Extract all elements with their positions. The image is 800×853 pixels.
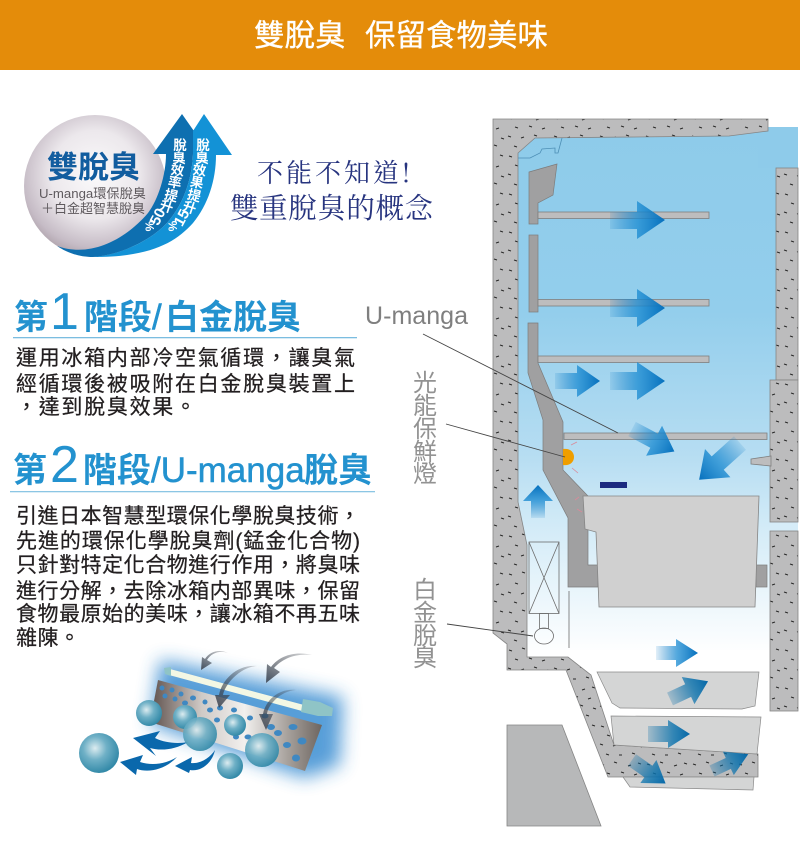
heading: stage 1: / <box>152 298 162 337</box>
duct detail <box>518 138 562 158</box>
text: stage 2 description: 食物最原始的美味，讓冰箱不再五味 <box>16 603 360 626</box>
right door walls <box>770 168 798 711</box>
illustration: deodorising filter <box>79 651 343 779</box>
heading: stage 1: 階段 <box>84 299 152 337</box>
text: stage 2 description: 進行分解，去除冰箱内部異味，保留 <box>16 580 360 603</box>
chiller box <box>583 496 759 607</box>
shelves <box>538 212 771 466</box>
insulated outer wall <box>493 119 768 777</box>
text: stage 2 description: 引進日本智慧型環保化學脫臭技術， <box>16 505 360 528</box>
heading: stage 2: 階段 <box>83 452 151 490</box>
heading: stage 1: 白金脫臭 <box>165 299 301 337</box>
label: light preservation lamp: 鮮 <box>413 439 437 466</box>
label: light preservation lamp: 能 <box>413 393 437 420</box>
back panels <box>528 164 767 587</box>
heading: stage 2: 脫臭 <box>304 452 372 490</box>
title banner: 保留食物美味 <box>365 19 548 53</box>
text: stage 2 description <box>16 505 360 650</box>
label: platinum deodoriser: 臭 <box>413 645 437 672</box>
handwritten concept text <box>230 153 434 227</box>
label: light preservation lamp: 燈 <box>413 461 437 488</box>
label: platinum deodoriser: 白 <box>413 577 437 604</box>
indicator bar <box>600 482 627 488</box>
light arrow text <box>166 138 210 231</box>
heading: stage 2: /U-manga <box>151 451 305 490</box>
text: stage 1 description: 運用冰箱内部冷空氣循環，讓臭氣 <box>16 347 355 370</box>
metal perforated panel <box>150 680 322 771</box>
diagram: refrigerator cross-section <box>493 119 798 826</box>
heading: stage 2 <box>10 436 375 494</box>
dark arrow text: 效 <box>170 161 186 179</box>
dark arrow text <box>143 138 187 231</box>
label: U-manga: U-manga <box>365 302 468 330</box>
title banner <box>0 0 800 70</box>
heading: stage 2: 第 <box>13 452 47 490</box>
badge subtext: U-manga環保脫臭 <box>39 186 146 201</box>
heading: stage 1: 1 <box>50 283 79 341</box>
leader line: platinum deodoriser <box>447 624 533 636</box>
light arrow text: % <box>166 220 180 231</box>
cold air interior <box>518 127 798 650</box>
drawers <box>597 672 761 790</box>
badge subtext <box>39 186 146 216</box>
dark arrow text: 臭 <box>172 150 186 166</box>
leader line: U-manga <box>423 334 618 433</box>
light arrow text: 脫 <box>196 138 210 153</box>
dark arrow text: 率 <box>167 173 183 191</box>
sphere <box>24 115 166 257</box>
text: stage 2 description: 雜陳。 <box>16 627 80 650</box>
handwritten concept text: 雙重脫臭的概念 <box>230 186 434 227</box>
lamp tube <box>164 667 333 716</box>
text: stage 1 description: 經循環後被吸附在白金脫臭裝置上 <box>16 373 355 396</box>
dark arrow text: 提 <box>163 187 180 205</box>
lamp <box>563 442 582 512</box>
blue outgoing arrows <box>120 731 215 775</box>
title banner: 雙脫臭 <box>254 19 346 53</box>
handwritten concept text: 不能不知道! <box>257 153 413 190</box>
compressor block <box>507 725 601 826</box>
heading: stage 2: 2 <box>50 436 79 494</box>
text: stage 1 description: ，達到脫臭效果。 <box>16 396 196 419</box>
light arrow text: 提 <box>186 187 203 205</box>
label: platinum deodoriser: 脫 <box>413 623 437 650</box>
heading: stage 1 <box>13 283 357 341</box>
label: platinum deodoriser: 金 <box>413 600 437 627</box>
light arrow text: 15 <box>171 207 193 229</box>
label: light preservation lamp: 保 <box>413 416 437 443</box>
dark arrow text: % <box>143 220 157 231</box>
blue glow <box>150 660 343 778</box>
badge: double deodorising sphere with arrows <box>24 114 232 257</box>
light arrow text: 升 <box>181 199 198 217</box>
text: stage 1 description <box>16 347 355 419</box>
label: light preservation lamp: 光 <box>413 370 437 397</box>
dark arrow text: 升 <box>158 198 175 216</box>
text: stage 2 description: 先進的環保化學脫臭劑(錳金化合物) <box>16 530 360 553</box>
leader line: lamp <box>446 424 565 457</box>
light arrow text: 臭 <box>195 150 209 166</box>
badge heading: 雙脫臭 <box>47 150 140 185</box>
dark arrow text: 脫 <box>173 138 187 153</box>
grey airflow arrows <box>201 651 312 730</box>
dark arrow text: 50 <box>147 206 169 228</box>
arrow: dark blue swoosh <box>57 114 210 257</box>
light arrow text: 果 <box>189 174 205 191</box>
heading: stage 1: 第 <box>14 299 48 337</box>
evaporator and fan <box>529 542 569 648</box>
bubbles <box>79 700 279 779</box>
light arrow text: 效 <box>192 161 208 179</box>
airflow arrows <box>523 201 753 667</box>
arrow: light blue swoosh <box>93 114 232 257</box>
badge subtext: ＋白金超智慧脫臭 <box>41 201 145 216</box>
text: stage 2 description: 只針對特定化合物進行作用，將臭味 <box>16 554 360 577</box>
